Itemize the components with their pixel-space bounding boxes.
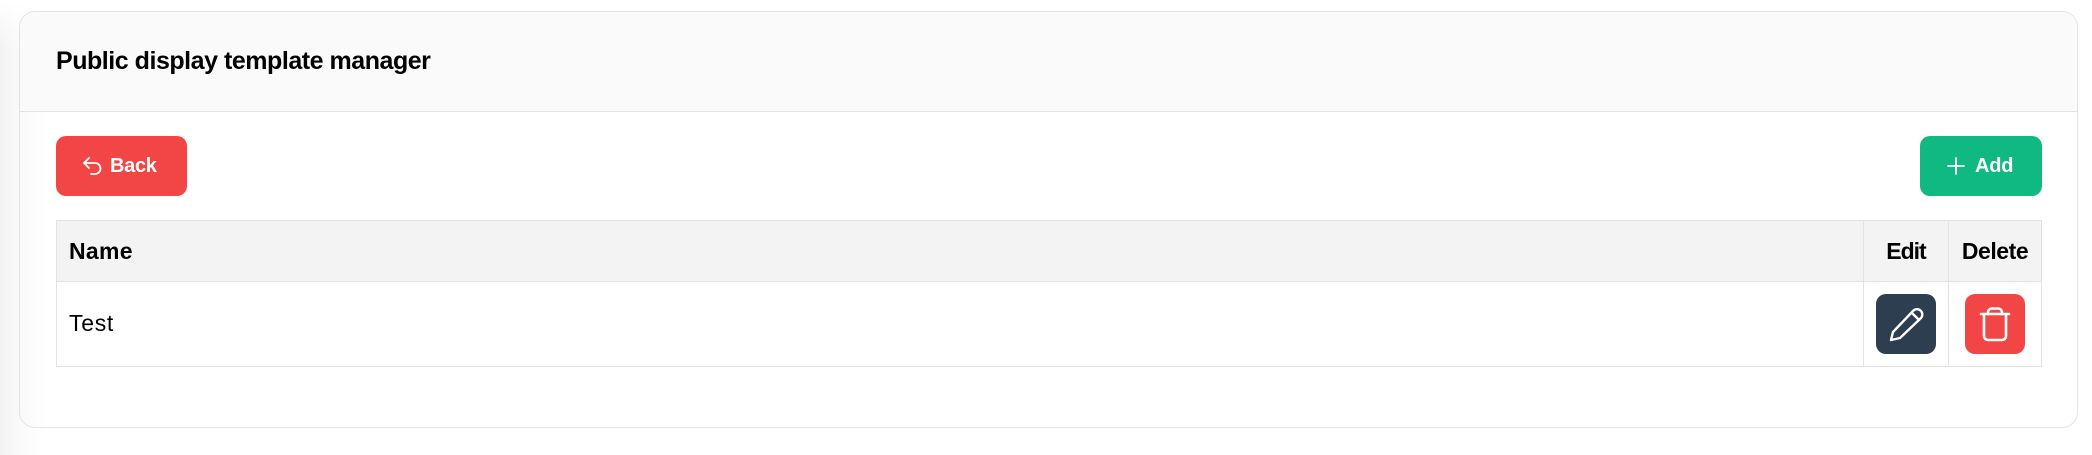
header cell: edit — [1863, 220, 1949, 282]
icon: pencil — [1890, 308, 1924, 342]
icon: plus — [1947, 157, 1965, 175]
header cell: name — [56, 220, 1864, 282]
back label: Back — [110, 155, 157, 177]
back button — [56, 136, 187, 196]
icon: back arrow — [83, 157, 102, 175]
header cell: delete — [1948, 220, 2042, 282]
delete heading: Delete — [1962, 238, 2028, 264]
table — [56, 220, 2042, 367]
add button — [1920, 136, 2042, 196]
card header — [20, 12, 2077, 112]
icon: trash can — [1980, 307, 2010, 342]
row cell: delete — [1948, 281, 2042, 367]
edit heading: Edit — [1886, 238, 1926, 264]
row cell: edit — [1863, 281, 1949, 367]
row name: Test — [69, 310, 114, 336]
name heading: Name — [69, 238, 133, 264]
left edge shading — [0, 32, 12, 455]
row cell: name — [56, 281, 1864, 367]
add label: Add — [1975, 155, 2013, 177]
title: Public display template manager — [56, 47, 430, 75]
delete button — [1965, 294, 2025, 354]
edit button — [1876, 294, 1936, 354]
